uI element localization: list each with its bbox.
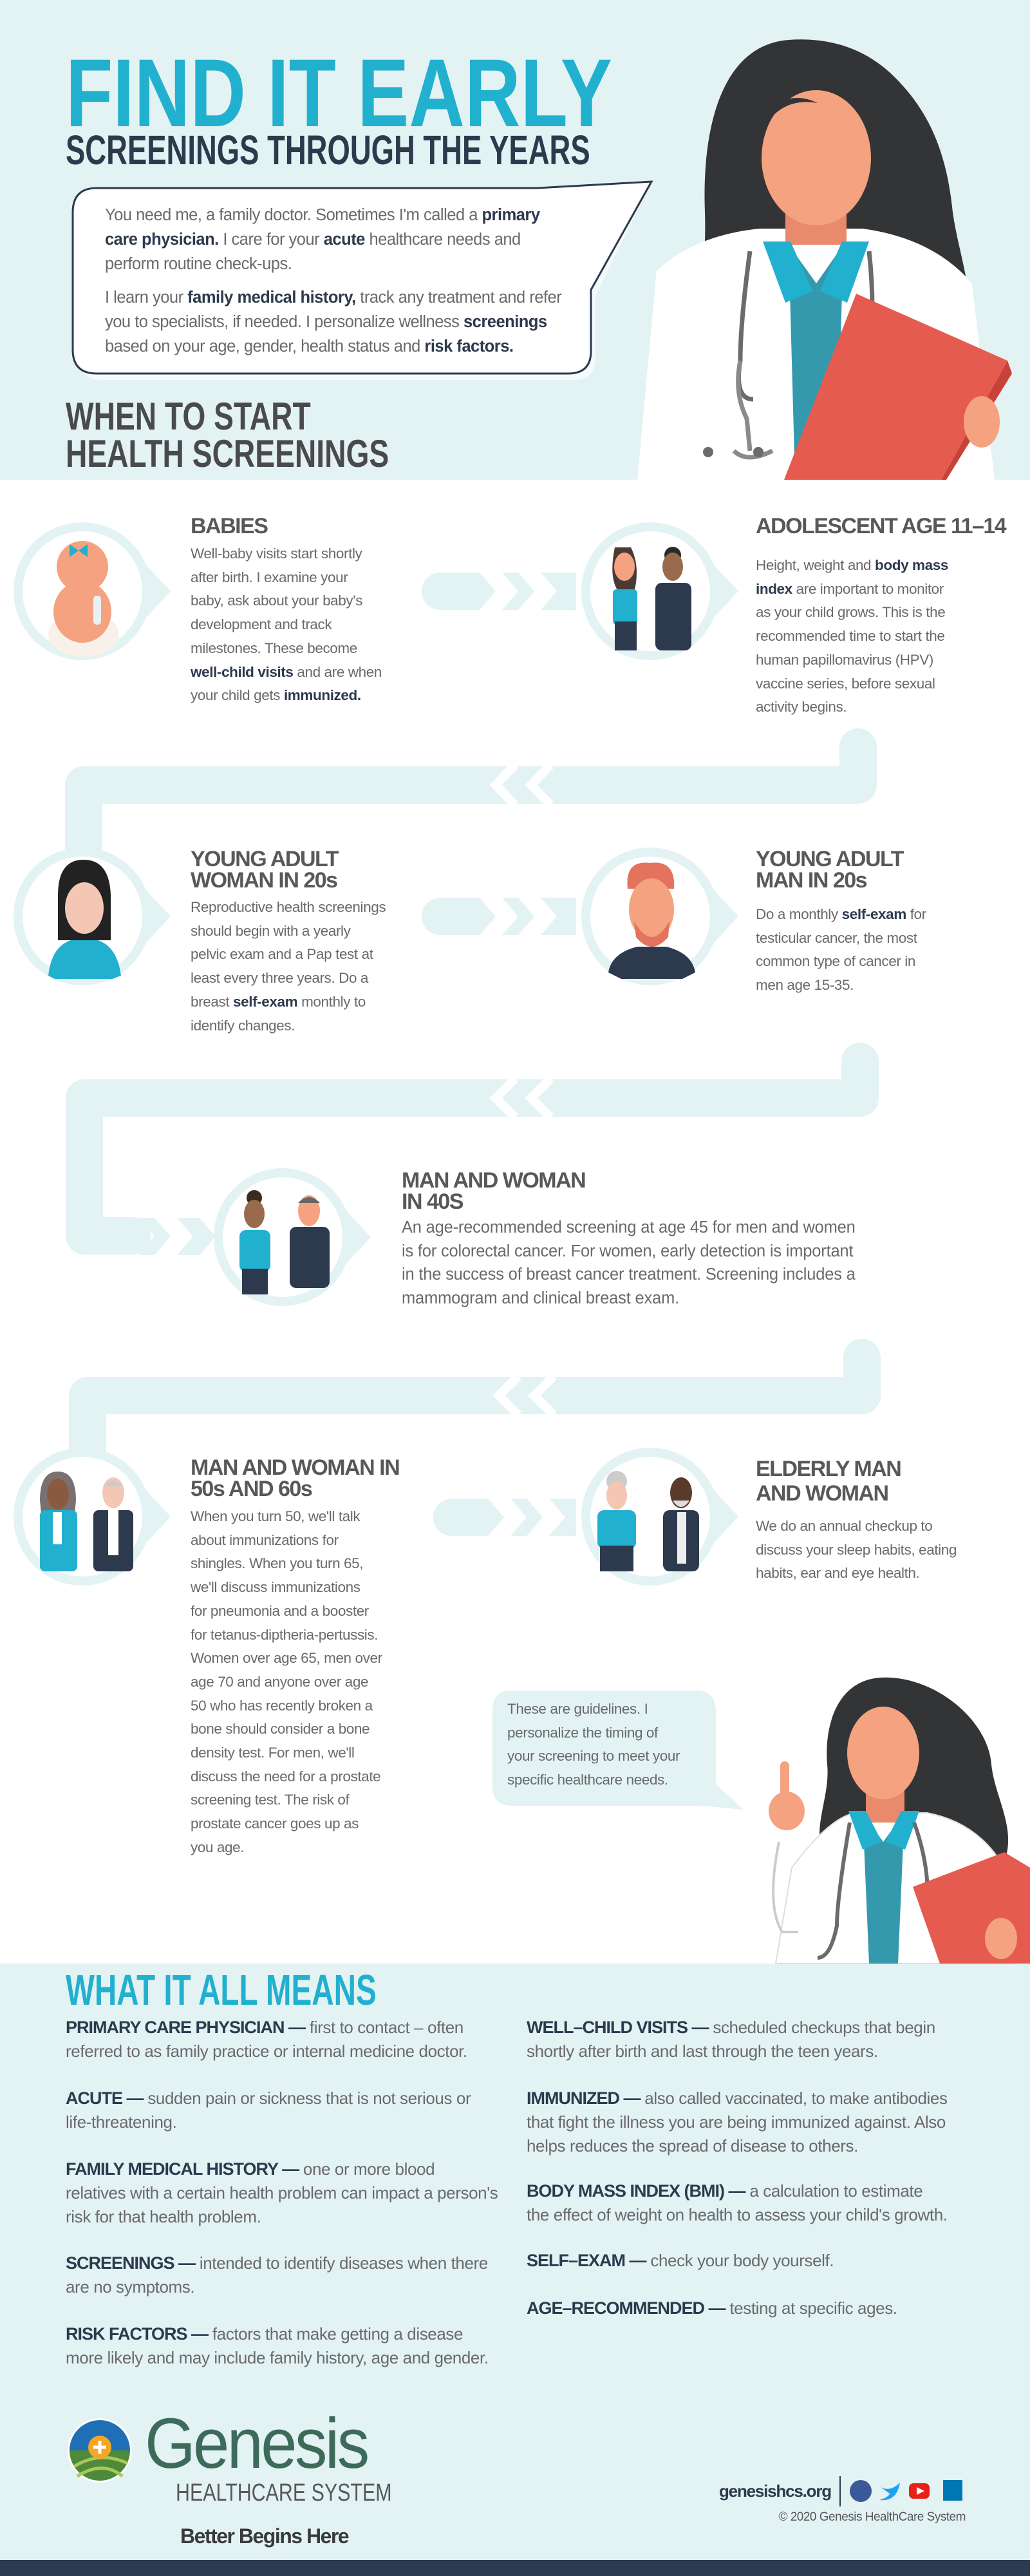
young man heading: MAN IN 20s xyxy=(756,868,866,893)
intro text: You need me, a family doctor. Sometimes I'm called a primary xyxy=(105,206,540,224)
doctor illustration top xyxy=(637,39,1012,480)
social icons xyxy=(840,2476,962,2506)
50s text: for tetanus-diptheria-pertussis. xyxy=(191,1627,378,1643)
tagline: Better Begins Here xyxy=(180,2524,348,2548)
elderly heading xyxy=(756,1457,901,1506)
doctor illustration bottom xyxy=(769,1678,1030,1964)
arrow row 2 xyxy=(422,898,576,935)
icon: man and woman 40s circle xyxy=(218,1173,371,1302)
elderly heading: ELDERLY MAN xyxy=(756,1457,901,1481)
50s text: discuss the need for a prostate xyxy=(191,1768,380,1785)
adolescent text: index are important to monitor xyxy=(756,581,944,597)
40s text: mammogram and clinical breast exam. xyxy=(402,1289,679,1307)
babies text: milestones. These become xyxy=(191,640,357,656)
young woman text: pelvic exam and a Pap test at xyxy=(191,946,373,962)
50s text: bone should consider a bone xyxy=(191,1721,370,1737)
guidelines text: your screening to meet your xyxy=(507,1748,680,1764)
definitions right column: that fight the illness you are being immunized against. Also xyxy=(527,2112,946,2132)
babies text: baby, ask about your baby's xyxy=(191,592,362,609)
young woman text: Reproductive health screenings xyxy=(191,899,386,915)
40s text: An age-recommended screening at age 45 for men and women xyxy=(402,1218,856,1236)
adolescent heading: ADOLESCENT AGE 11–14 xyxy=(756,514,1006,538)
heading: when to start: HEALTH SCREENINGS xyxy=(66,432,389,475)
50s text: prostate cancer goes up as xyxy=(191,1815,359,1832)
50s text: density test. For men, we'll xyxy=(191,1745,354,1761)
guidelines text: personalize the timing of xyxy=(507,1725,658,1741)
subtitle: SCREENINGS THROUGH THE YEARS xyxy=(66,127,590,173)
young woman heading: WOMAN IN 20s xyxy=(191,868,337,893)
50s text: When you turn 50, we'll talk xyxy=(191,1508,360,1524)
young woman text xyxy=(191,899,386,1034)
50s text: age 70 and anyone over age xyxy=(191,1674,368,1690)
intro text: perform routine check-ups. I learn your family medical history, track any treatment and refer xyxy=(105,255,561,307)
young woman text: should begin with a yearly xyxy=(191,923,351,939)
logo text xyxy=(145,2404,392,2506)
heading: when to start xyxy=(66,395,389,475)
definitions right column: shortly after birth and last through the teen years. xyxy=(527,2041,878,2061)
definitions right column: WELL–CHILD VISITS — scheduled checkups that begin xyxy=(527,2018,935,2037)
intro text: care physician. I care for your acute healthcare needs and xyxy=(105,231,521,249)
footer bar xyxy=(0,2560,1030,2576)
definitions left column: life-threatening. xyxy=(66,2112,176,2132)
icon: young woman circle xyxy=(18,852,171,981)
arrow row 4 xyxy=(433,1499,576,1536)
adolescent text: vaccine series, before sexual xyxy=(756,676,935,692)
guidelines text: These are guidelines. I xyxy=(507,1701,648,1717)
intro text: based on your age, gender, health status and risk factors. xyxy=(105,337,513,355)
icon: young man circle xyxy=(586,852,738,981)
connector path 2 xyxy=(84,1061,860,1255)
copyright: © 2020 Genesis HealthCare System xyxy=(778,2510,966,2524)
icon: baby circle xyxy=(18,527,171,657)
definitions right column: AGE–RECOMMENDED — testing at specific ages. xyxy=(527,2298,897,2318)
definitions left column: SCREENINGS — intended to identify diseases when there xyxy=(66,2253,488,2273)
header background xyxy=(0,0,1030,480)
40s text xyxy=(402,1218,856,1307)
title: FIND IT EARLY xyxy=(66,39,612,147)
young woman text: identify changes. xyxy=(191,1018,295,1034)
babies text: after birth. I examine your xyxy=(191,569,348,585)
50s heading: MAN AND WOMAN IN xyxy=(191,1455,399,1480)
50s text xyxy=(191,1508,382,1855)
logo text: Genesis xyxy=(145,2404,367,2483)
definitions left column: are no symptoms. xyxy=(66,2277,194,2297)
arrow row 1 xyxy=(422,573,576,610)
speech bubble: guidelines xyxy=(492,1690,744,1810)
50s text: shingles. When you turn 65, xyxy=(191,1555,363,1571)
young woman text: breast self-exam monthly to xyxy=(191,994,366,1010)
definitions right column: BODY MASS INDEX (BMI) — a calculation to estimate xyxy=(527,2181,922,2201)
young man text xyxy=(756,906,926,993)
50s text: we'll discuss immunizations xyxy=(191,1579,360,1595)
connector path 1 xyxy=(84,747,858,857)
elderly text: We do an annual checkup to xyxy=(756,1518,932,1534)
definitions left column: PRIMARY CARE PHYSICIAN — first to contact – often xyxy=(66,2018,464,2037)
babies text: Well-baby visits start shortly xyxy=(191,545,362,562)
elderly text: discuss your sleep habits, eating xyxy=(756,1542,957,1558)
young woman heading: YOUNG ADULT xyxy=(191,847,338,871)
logo mark xyxy=(68,2418,132,2483)
young woman heading xyxy=(191,847,339,893)
young man text: Do a monthly self-exam for xyxy=(756,906,926,922)
50s text: 50 who has recently broken a xyxy=(191,1698,373,1714)
elderly heading: AND WOMAN xyxy=(756,1481,888,1506)
adolescent text: recommended time to start the xyxy=(756,628,945,644)
definitions left column xyxy=(66,2018,498,2367)
definitions left column: referred to as family practice or internal medicine doctor. xyxy=(66,2041,467,2061)
adolescent text: human papillomavirus (HPV) xyxy=(756,652,933,668)
definitions left column: more likely and may include family history, age and gender. xyxy=(66,2348,489,2367)
40s heading: IN 40S xyxy=(402,1189,463,1214)
intro text: you to specialists, if needed. I personalize wellness screenings xyxy=(105,313,547,331)
elderly text xyxy=(756,1518,957,1581)
heading: when to start: WHEN TO START xyxy=(66,395,311,438)
definitions left column: relatives with a certain health problem can impact a person's xyxy=(66,2183,498,2202)
definitions right column: SELF–EXAM — check your body yourself. xyxy=(527,2251,834,2270)
50s text: for pneumonia and a booster xyxy=(191,1603,369,1619)
definitions right column xyxy=(527,2018,948,2318)
50s text: Women over age 65, men over xyxy=(191,1650,382,1666)
young man text: testicular cancer, the most xyxy=(756,930,917,946)
adolescent text: as your child grows. This is the xyxy=(756,604,945,620)
definitions left column: ACUTE — sudden pain or sickness that is not serious or xyxy=(66,2088,471,2108)
young man text: men age 15-35. xyxy=(756,977,854,993)
young man text: common type of cancer in xyxy=(756,953,915,969)
definitions left column: risk for that health problem. xyxy=(66,2207,261,2226)
definitions left column: RISK FACTORS — factors that make getting a disease xyxy=(66,2324,463,2344)
definitions right column: the effect of weight on health to assess your child's growth. xyxy=(527,2205,948,2224)
40s text: is for colorectal cancer. For women, early detection is important xyxy=(402,1242,853,1260)
40s text: in the success of breast cancer treatment. Screening includes a xyxy=(402,1265,856,1283)
young woman text: least every three years. Do a xyxy=(191,970,368,986)
babies text xyxy=(191,545,382,703)
logo text: HEALTHCARE SYSTEM xyxy=(176,2479,392,2506)
babies text: your child gets immunized. xyxy=(191,687,361,703)
icon: adolescents circle xyxy=(586,527,738,656)
50s text: about immunizations for xyxy=(191,1532,339,1548)
elderly text: habits, ear and eye health. xyxy=(756,1565,919,1581)
babies heading: BABIES xyxy=(191,514,267,538)
intro text xyxy=(105,206,561,355)
website: genesishcs.org xyxy=(719,2481,831,2501)
young man heading xyxy=(756,847,904,893)
definitions right column: helps reduces the spread of disease to others. xyxy=(527,2136,858,2155)
icon: man and woman 50s circle xyxy=(18,1452,171,1581)
adolescent text: activity begins. xyxy=(756,699,847,715)
adolescent text: Height, weight and body mass xyxy=(756,557,948,573)
babies text: development and track xyxy=(191,616,332,632)
50s heading xyxy=(191,1455,399,1501)
young man heading: YOUNG ADULT xyxy=(756,847,903,871)
guidelines text xyxy=(507,1701,680,1788)
40s heading xyxy=(402,1168,585,1214)
50s text: screening test. The risk of xyxy=(191,1792,349,1808)
definitions right column: IMMUNIZED — also called vaccinated, to make antibodies xyxy=(527,2088,948,2108)
guidelines text: specific healthcare needs. xyxy=(507,1772,668,1788)
40s heading: MAN AND WOMAN xyxy=(402,1168,585,1193)
speech bubble: intro xyxy=(73,182,651,380)
icon: elderly circle xyxy=(586,1452,738,1581)
babies text: well-child visits and are when xyxy=(191,664,382,680)
heading: what it all means: WHAT IT ALL MEANS xyxy=(66,1966,377,2014)
connector path 3 xyxy=(88,1358,862,1455)
50s heading: 50s AND 60s xyxy=(191,1477,312,1501)
adolescent text xyxy=(756,557,948,715)
definitions left column: FAMILY MEDICAL HISTORY — one or more blood xyxy=(66,2159,435,2179)
50s text: you age. xyxy=(191,1839,244,1855)
definitions background xyxy=(0,1964,1030,2560)
